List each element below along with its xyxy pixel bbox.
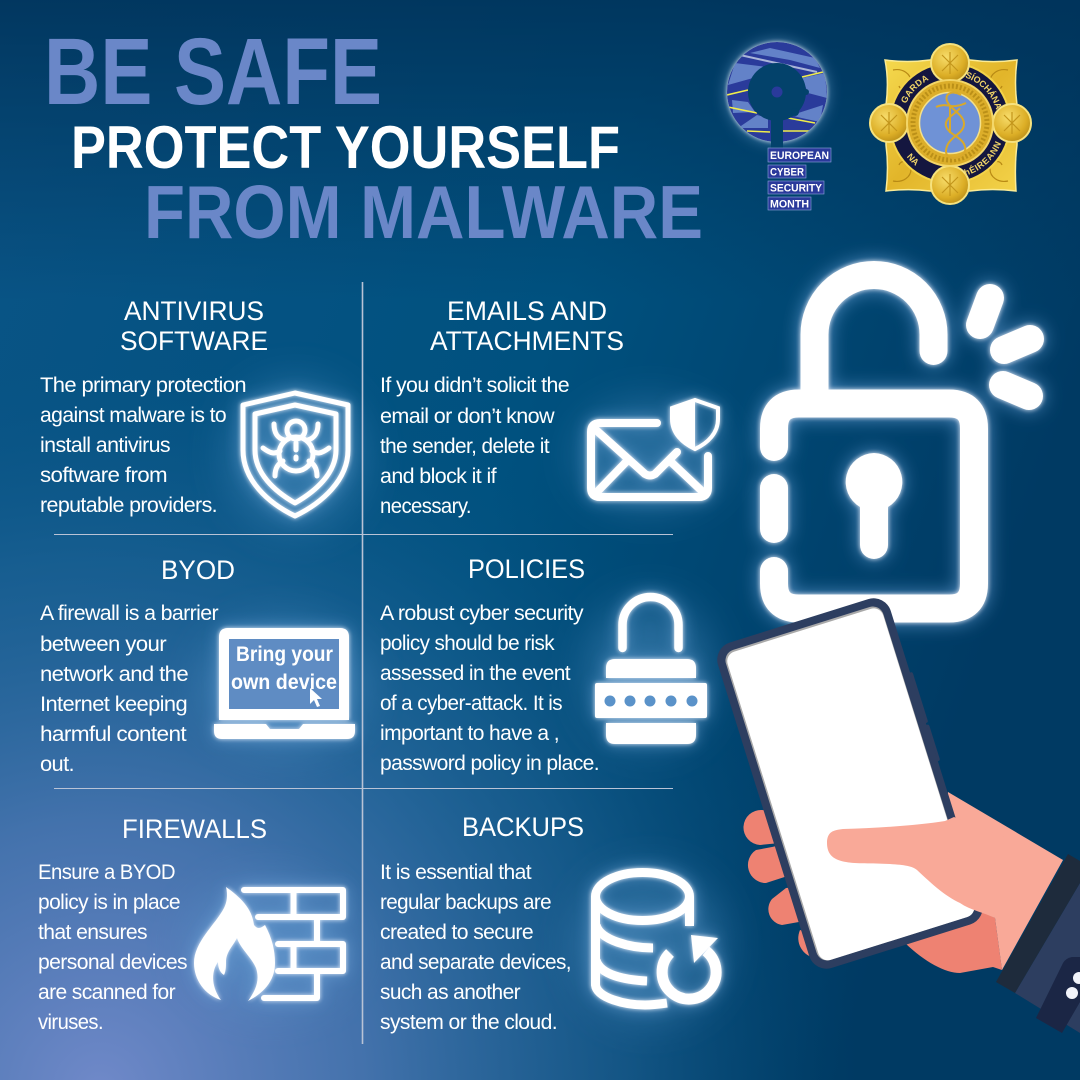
logo: European Cyber Security Month [727, 42, 831, 210]
text: backups [380, 861, 571, 1034]
text: firewalls: are scanned for [38, 981, 176, 1004]
text: firewalls: personal devices [38, 951, 187, 974]
text: emails: and block it if [380, 465, 497, 488]
back of hand [940, 792, 1063, 900]
cursor [310, 688, 322, 707]
text: policies: password policy in place. [380, 752, 599, 775]
title [44, 19, 703, 254]
heading: emails and attachments [430, 296, 624, 356]
laptop caption: own device [231, 670, 337, 694]
text: backups: system or the cloud. [380, 1011, 557, 1034]
text: emails: If you didn’t solicit the [380, 374, 569, 397]
heading: emails and attachments: ATTACHMENTS [430, 326, 624, 356]
heading: antivirus software [120, 296, 268, 356]
icon: laptop [214, 628, 355, 739]
sleeve [1015, 883, 1080, 1033]
palm [905, 910, 1002, 973]
side buttons [907, 672, 928, 724]
illustration: hand holding phone [713, 593, 1080, 1033]
logo wordmark: MONTH [770, 198, 809, 210]
text: policies [380, 602, 599, 775]
logo wordmark [768, 148, 831, 210]
badge lettering [902, 72, 1002, 176]
text: emails: the sender, delete it [380, 435, 550, 458]
cuff [996, 854, 1080, 993]
text: policies: assessed in the event [380, 662, 571, 685]
text: policies: policy should be risk [380, 632, 555, 655]
text: emails [380, 374, 569, 518]
text: BYOD: between your [40, 633, 167, 656]
text: backups: created to secure [380, 921, 533, 944]
heading: firewalls: FIREWALLS [122, 814, 267, 844]
heading: BYOD: BYOD [161, 555, 235, 585]
text: firewalls: policy is in place [38, 891, 180, 914]
sleeve tab [1036, 957, 1080, 1033]
icon: flame and brick wall [194, 887, 343, 1001]
fingers [743, 810, 1002, 973]
text: backups: regular backups are [380, 891, 551, 914]
heading: antivirus software: SOFTWARE [120, 326, 268, 356]
text: antivirus: install antivirus [40, 434, 170, 457]
spark lines [980, 298, 1030, 396]
badge lettering: SÍOCHÁNA [966, 72, 1002, 110]
illustration: large padlock [774, 275, 1030, 608]
hole and stem [748, 63, 809, 148]
hand and thumb [827, 817, 1063, 970]
logo wordmark: EUROPEAN [770, 150, 829, 162]
title line: protect yourself: PROTECT YOURSELF [71, 114, 620, 181]
text: firewalls: Ensure a BYOD [38, 861, 175, 884]
text: antivirus: against malware is to [40, 404, 226, 427]
text: firewalls [38, 861, 187, 1034]
grid dividers [54, 282, 673, 1044]
logo wordmark: SECURITY [770, 182, 823, 194]
badge lettering: GARDA [902, 76, 929, 103]
heading: policies: POLICIES [468, 554, 585, 584]
text: BYOD: out. [40, 753, 74, 776]
text: backups: such as another [380, 981, 521, 1004]
text: BYOD: Internet keeping [40, 693, 187, 716]
logo wordmark: CYBER [770, 166, 804, 178]
panel: BYOD [40, 555, 355, 776]
text: policies: of a cyber-attack. It is [380, 692, 562, 715]
heading: antivirus software: ANTIVIRUS [124, 296, 264, 326]
heading: emails and attachments: EMAILS AND [447, 296, 607, 326]
icon: password padlock [595, 597, 707, 744]
icon: shield with bug [243, 393, 348, 516]
panel: firewalls [38, 814, 343, 1034]
badge lettering: hÉIREANN [964, 141, 1001, 176]
text: antivirus: The primary protection [40, 374, 246, 397]
panel: emails and attachments [380, 296, 718, 518]
text: backups: and separate devices, [380, 951, 571, 974]
text: BYOD: harmful content [40, 723, 187, 746]
keyhole [846, 453, 902, 559]
text: antivirus: software from [40, 464, 167, 487]
badge monogram [936, 93, 966, 158]
panel: antivirus software [40, 296, 348, 517]
text: backups: It is essential that [380, 861, 532, 884]
badge lettering: NA [906, 153, 918, 166]
text: BYOD: A firewall is a barrier [40, 602, 219, 625]
title line: be safe: BE SAFE [44, 19, 382, 125]
text: policies: A robust cyber security [380, 602, 584, 625]
text: antivirus [40, 374, 246, 517]
text: firewalls: that ensures [38, 921, 147, 944]
icon: database with refresh arrow [596, 872, 718, 1005]
text: policies: important to have a , [380, 722, 559, 745]
panel: policies [380, 554, 707, 775]
logo: Garda Siochana badge [869, 43, 1032, 205]
laptop caption [231, 642, 337, 694]
phone [713, 593, 990, 973]
text: emails: email or don’t know [380, 405, 555, 428]
text: firewalls: viruses. [38, 1011, 103, 1034]
text: emails: necessary. [380, 495, 471, 518]
title line: from malware: FROM MALWARE [144, 170, 703, 254]
text: BYOD [40, 602, 219, 776]
text: BYOD: network and the [40, 663, 188, 686]
laptop caption: Bring your [236, 642, 334, 666]
sleeve buttons [1066, 972, 1080, 999]
text: antivirus: reputable providers. [40, 494, 217, 517]
icon: envelope with shield [591, 400, 718, 497]
heading: backups: BACKUPS [462, 812, 584, 842]
panel: backups [380, 812, 718, 1034]
